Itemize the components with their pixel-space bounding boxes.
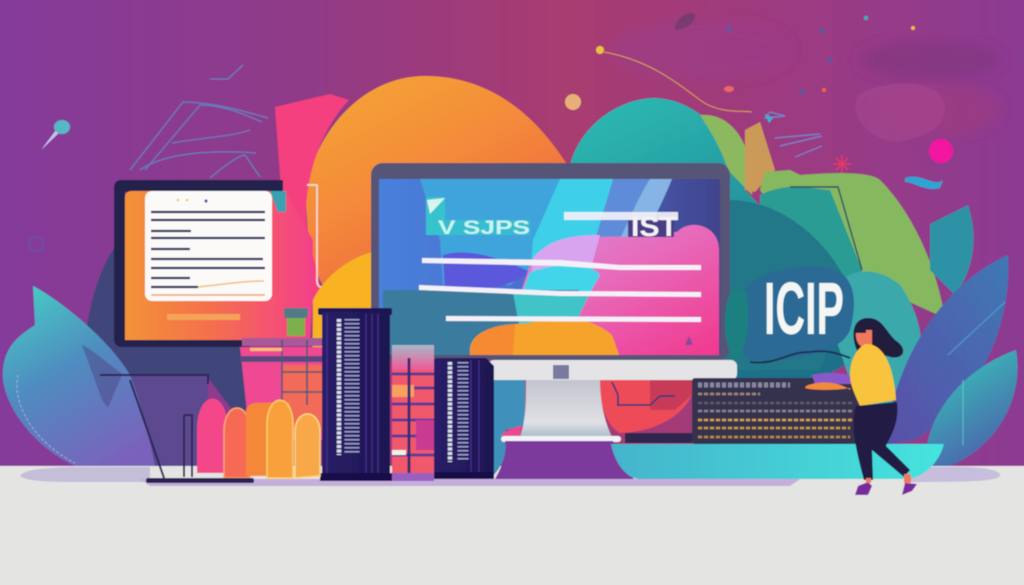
screen logo block: [426, 197, 530, 239]
lamp base: [146, 478, 254, 483]
right logo text: ICIP: [764, 267, 844, 350]
desk lamp stand: [100, 375, 208, 478]
small plant icon: [685, 336, 693, 345]
person: [805, 318, 917, 495]
large monitor: [371, 163, 730, 360]
heading glyphs: [564, 211, 678, 242]
heading glyphs: IST: [631, 211, 678, 242]
back left orange blob: [305, 76, 566, 300]
monitor stand: [488, 360, 737, 442]
pink panel behind shelves: [240, 347, 322, 440]
rack between towers: [392, 345, 434, 481]
right teal leaf cluster: [730, 200, 974, 410]
yellow blob behind monitors: [312, 252, 372, 400]
back right teal blob: [570, 98, 890, 390]
right large blue leaves: [885, 255, 1018, 466]
screen colour shapes: [383, 179, 719, 355]
orange arch cushions: [197, 398, 320, 478]
red cable panel: [599, 380, 692, 433]
keyboard: [692, 378, 864, 444]
left lower panel: [100, 375, 208, 466]
screen logo block: V SJPS: [438, 218, 530, 239]
floating particles and lines: [29, 13, 953, 251]
teal panel left of stand: [494, 380, 525, 475]
left server tower: [318, 308, 392, 481]
document card: [145, 191, 272, 301]
dark mass behind left monitor: [84, 240, 250, 420]
teal tray: [611, 444, 944, 479]
pink ribbon shape: [275, 94, 349, 310]
screen text lines: [419, 258, 701, 322]
green foliage: [700, 115, 945, 320]
cable arc: [750, 351, 850, 362]
right logo text: [725, 267, 854, 362]
floor: [0, 466, 1024, 585]
white angular line: [307, 185, 336, 287]
left large leaf: [3, 286, 155, 466]
purple base under monitor: [495, 441, 634, 479]
shelves: [240, 308, 322, 430]
right server tower: [434, 358, 494, 479]
left monitor: [114, 180, 313, 347]
